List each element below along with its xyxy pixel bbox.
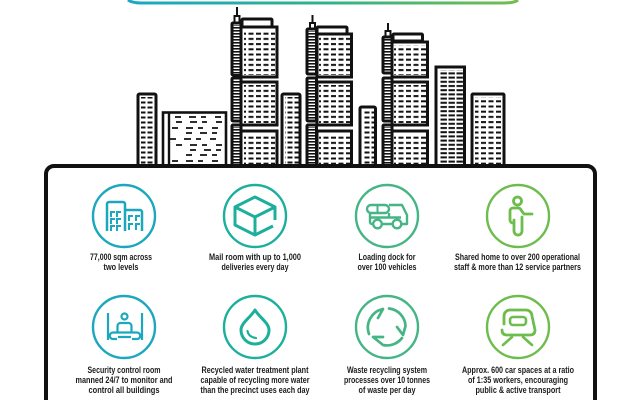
icon: parcel <box>224 185 286 247</box>
building: short tower <box>360 107 376 166</box>
caption: Approx. 600 car spaces at a ratio <box>462 365 575 375</box>
city skyline <box>138 7 504 166</box>
top banner pill <box>128 0 518 3</box>
caption <box>209 252 301 272</box>
building: small left tower <box>138 94 156 166</box>
icon: water drop <box>224 296 286 358</box>
caption: Recycled water treatment plant <box>202 365 309 375</box>
item: floor area <box>90 185 155 272</box>
caption <box>200 365 310 395</box>
caption: deliveries every day <box>222 262 289 272</box>
main panel <box>46 166 595 400</box>
tower three <box>383 23 428 166</box>
item: loading dock <box>356 185 418 272</box>
building: tall slim block <box>436 67 464 166</box>
icon: recycling arrows <box>356 296 418 358</box>
icon: buildings <box>93 185 155 247</box>
tower two <box>307 15 352 166</box>
item: security control room <box>76 296 172 395</box>
caption: public & active transport <box>476 385 561 395</box>
icon: train <box>487 296 549 358</box>
caption <box>462 365 575 395</box>
caption <box>76 365 172 395</box>
caption: control all buildings <box>88 385 160 395</box>
caption <box>90 252 152 272</box>
item: car spaces <box>462 296 575 395</box>
item: recycled water <box>200 296 310 395</box>
tower one <box>232 7 277 166</box>
item: waste recycling <box>344 296 430 395</box>
caption: Waste recycling system <box>347 365 427 375</box>
caption: than the precinct uses each day <box>200 385 310 395</box>
caption <box>358 252 417 272</box>
caption: of 1:35 workers, encouraging <box>468 375 568 385</box>
caption: Mail room with up to 1,000 <box>209 252 301 262</box>
caption: over 100 vehicles <box>358 262 417 272</box>
caption <box>344 365 430 395</box>
caption: of waste per day <box>358 385 416 395</box>
caption: staff & more than 12 service partners <box>454 262 581 272</box>
icon: person <box>487 185 549 247</box>
caption: Loading dock for <box>358 252 416 262</box>
item: operational staff <box>454 185 581 272</box>
item: mail room <box>209 185 301 272</box>
caption: processes over 10 tonnes <box>344 375 430 385</box>
caption: two levels <box>104 262 139 272</box>
building: wide low block <box>163 112 226 166</box>
caption: capable of recycling more water <box>200 375 310 385</box>
caption <box>454 252 581 272</box>
icon: operator at desk <box>93 296 155 358</box>
building: right block <box>472 94 504 166</box>
icon: truck <box>356 185 418 247</box>
caption: Shared home to over 200 operational <box>455 252 580 262</box>
caption: manned 24/7 to monitor and <box>76 375 172 385</box>
building: narrow middle tower <box>282 94 300 166</box>
caption: Security control room <box>88 365 161 375</box>
caption: 77,000 sqm across <box>90 252 152 262</box>
